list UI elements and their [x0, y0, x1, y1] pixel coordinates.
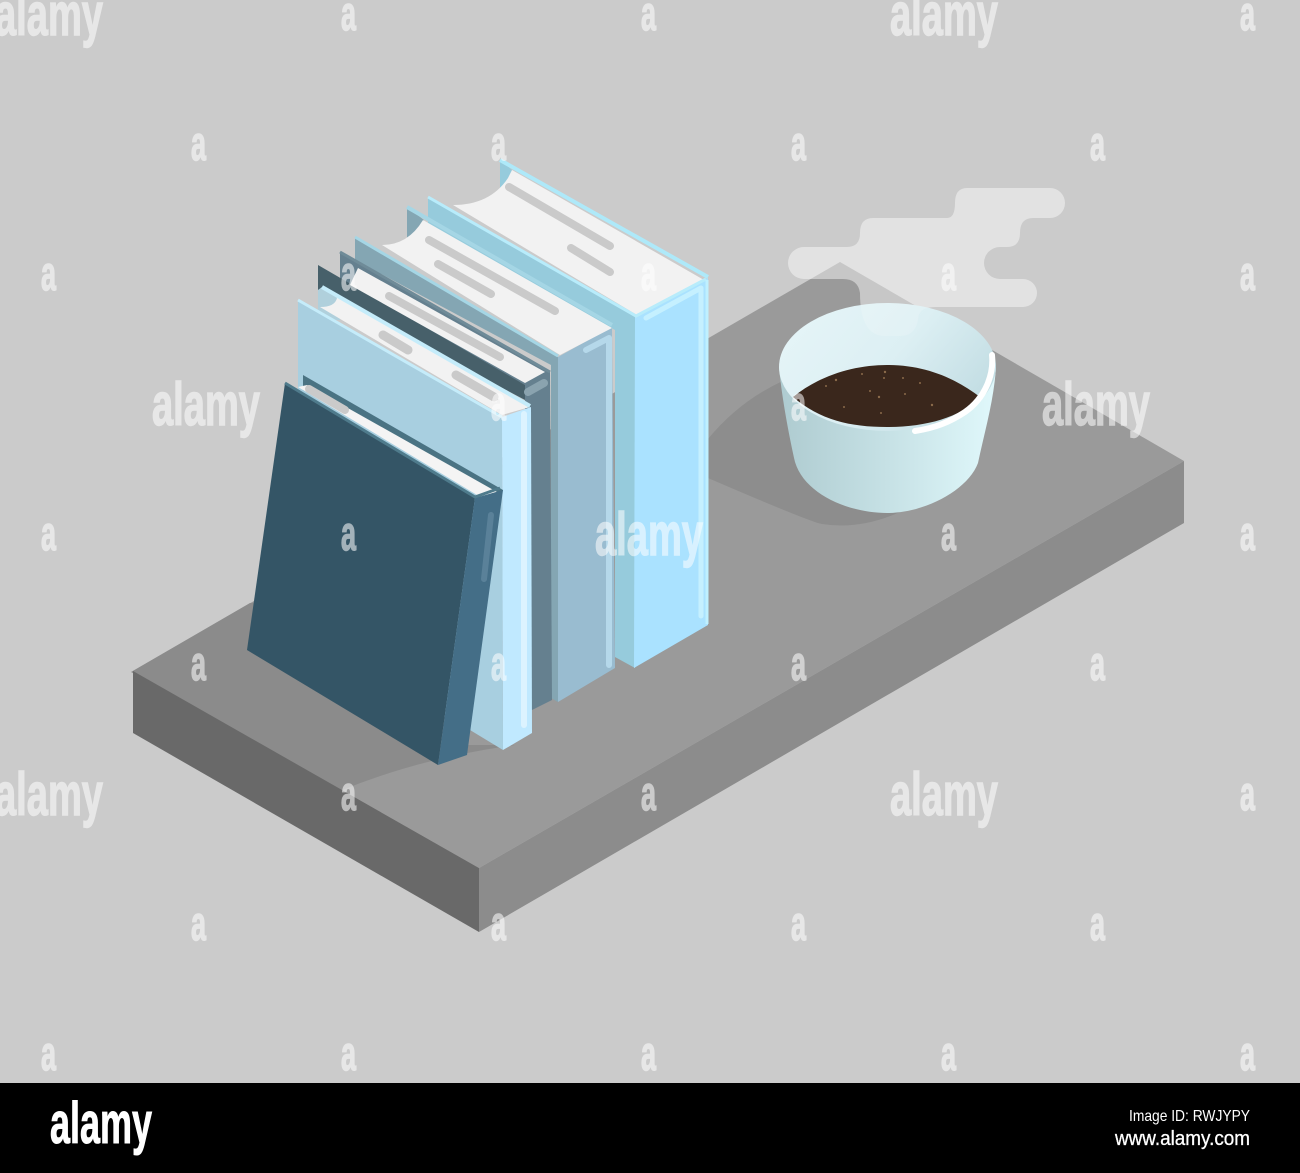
watermark: a [191, 898, 206, 951]
watermark: alamy [890, 761, 998, 828]
watermark: a [791, 898, 806, 951]
coffee surface [793, 365, 980, 427]
watermark: a [41, 248, 56, 301]
watermark: a [791, 118, 806, 171]
rim highlight [915, 355, 992, 431]
watermark: a [941, 248, 956, 301]
shadow: cup [708, 380, 900, 526]
watermark: a [1240, 508, 1255, 561]
watermark: alamy [595, 501, 703, 568]
watermark: a [191, 118, 206, 171]
watermark: a [1240, 1028, 1255, 1081]
watermark: a [1090, 118, 1105, 171]
steam: behind the cup [788, 188, 1065, 336]
watermark: a [641, 1028, 656, 1081]
watermark: a [1240, 768, 1255, 821]
watermark: a [641, 768, 656, 821]
book: leaning dark teal [247, 375, 503, 765]
cup inner wall [779, 303, 996, 431]
watermark: a [191, 638, 206, 691]
watermark: a [341, 248, 356, 301]
steam: faint inside the cup [780, 279, 1000, 336]
watermark: a [791, 378, 806, 431]
footer logo: alamy [50, 1091, 152, 1156]
coffee cup [779, 303, 996, 513]
watermark: a [491, 378, 506, 431]
watermark: a [41, 1028, 56, 1081]
watermark: a [341, 1028, 356, 1081]
book: second grey blue [355, 207, 615, 702]
shadow: books [131, 600, 515, 791]
watermark: a [341, 768, 356, 821]
watermark: a [941, 508, 956, 561]
watermark: a [341, 508, 356, 561]
book: third dark thin [318, 252, 552, 712]
book: rightmost large [428, 160, 708, 668]
watermark: a [1090, 638, 1105, 691]
image id: Image ID: RWJYPY [1129, 1108, 1250, 1125]
watermark: a [641, 248, 656, 301]
watermark: a [941, 1028, 956, 1081]
watermark: a [41, 508, 56, 561]
book: fourth light blue [298, 287, 532, 750]
watermark: a [491, 898, 506, 951]
watermark: a [791, 638, 806, 691]
shelf [131, 262, 1184, 932]
coffee speckles [825, 371, 933, 414]
watermark: a [1090, 898, 1105, 951]
footer bar [0, 1083, 1300, 1173]
watermark: a [491, 118, 506, 171]
watermark: alamy [0, 761, 103, 828]
watermark: a [491, 638, 506, 691]
watermark: alamy [1042, 371, 1150, 438]
cup outer wall [779, 367, 996, 513]
website: www.alamy.com [1114, 1128, 1250, 1150]
watermark: a [1240, 248, 1255, 301]
watermark: alamy [152, 371, 260, 438]
